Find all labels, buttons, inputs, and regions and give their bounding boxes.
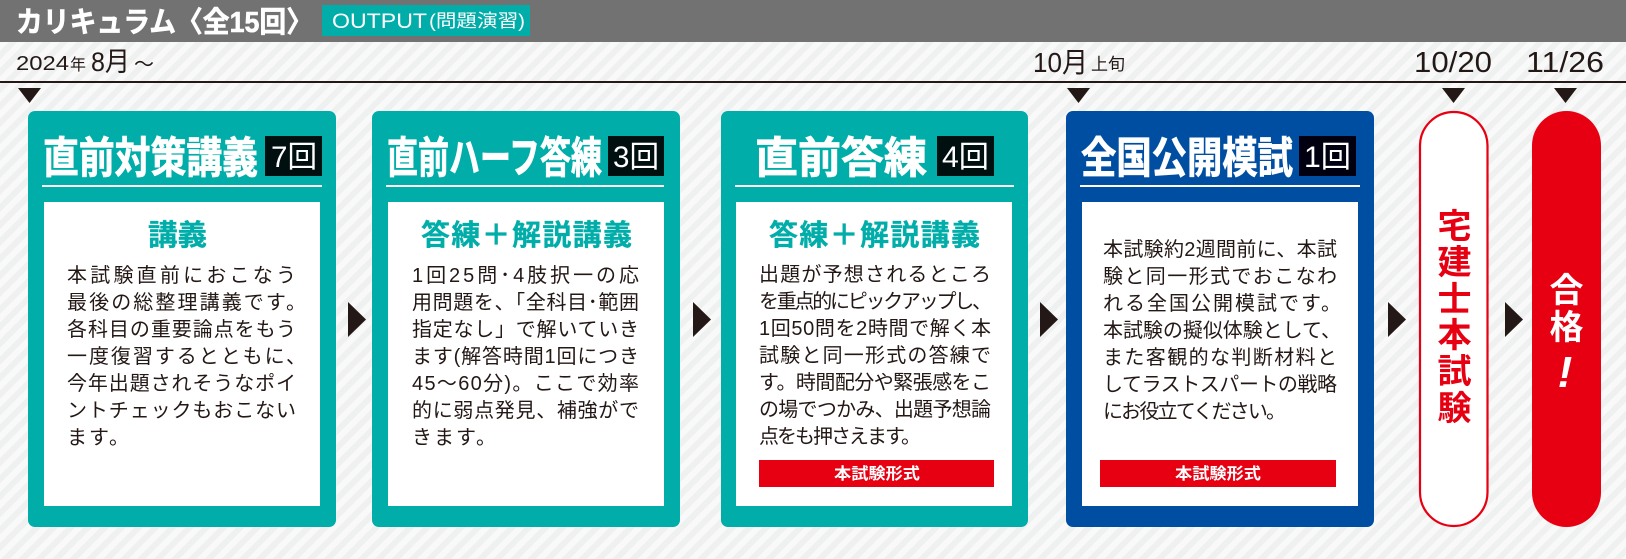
panel: 直前ハーフ答練 <box>372 111 680 527</box>
timeline dates: 2024 <box>16 53 69 75</box>
output tag <box>322 5 530 36</box>
text block: 答練＋解説講義 <box>769 219 980 252</box>
count badge: 3回 <box>613 141 659 174</box>
text block: 1回25問･4肢択一の応 <box>412 264 639 287</box>
text block: 的に弱点発見、補強がで <box>412 399 639 422</box>
text block: 用問題を、「全科目･範囲 <box>412 291 639 314</box>
text block: す。時間配分や緊張感をこ <box>759 371 991 394</box>
text block: 一度復習するとともに、 <box>67 345 306 368</box>
pill: 宅建士本試験 <box>1420 112 1488 526</box>
count badge: 4回 <box>942 141 989 174</box>
pill: 合格! <box>1532 111 1601 527</box>
text block: きます。 <box>412 427 496 449</box>
text block: また客観的な判断材料と <box>1103 346 1337 369</box>
heading: 直前答練 <box>755 135 927 183</box>
count badge <box>1299 136 1356 176</box>
text block: 本試験直前におこなう <box>67 264 296 287</box>
output tag: (問題演習) <box>429 11 525 31</box>
timeline dates: 8月 <box>91 47 130 77</box>
text block: 1回50問を2時間で解く本 <box>759 317 991 340</box>
count badge <box>937 136 994 176</box>
text block: 験と同一形式でおこなわ <box>1103 265 1337 288</box>
text block: してラストスパートの戦略 <box>1103 373 1337 396</box>
text block: ます(解答時間1回につき <box>412 345 639 368</box>
text block: 45〜60分)。ここで効率 <box>412 372 639 395</box>
arrow <box>1388 302 1406 337</box>
pill: 合格!: ! <box>1558 348 1572 397</box>
arrow <box>348 302 366 337</box>
timeline dates: 10月 <box>1033 47 1088 78</box>
text block: 本試験約2週間前に、本試 <box>1103 238 1337 261</box>
timeline dates: 上旬 <box>1091 55 1125 74</box>
pill: 合格!: 合 <box>1550 272 1584 310</box>
text block: 講義 <box>148 219 207 252</box>
header bar <box>0 0 1626 42</box>
text block: 本試験の擬似体験として、 <box>1103 319 1341 342</box>
panel: 全国公開模試 <box>1066 111 1374 527</box>
count badge: 7回 <box>271 141 317 174</box>
text block: 点をも押さえます。 <box>759 425 921 448</box>
arrow <box>693 302 711 337</box>
timeline dates: 11/26 <box>1526 47 1604 79</box>
arrow <box>1040 302 1058 337</box>
count badge: 1回 <box>1304 141 1351 174</box>
format label <box>759 460 994 487</box>
text block: れる全国公開模試です。 <box>1103 292 1341 315</box>
pill: 宅建士本試験: 宅 <box>1438 208 1472 246</box>
text block: 今年出題されそうなポイ <box>67 372 296 395</box>
text block: 最後の総整理講義です。 <box>67 291 306 314</box>
text block <box>736 202 1012 506</box>
timeline markers <box>18 88 1577 103</box>
timeline dates <box>16 47 1604 79</box>
text block: 指定なし」で解いていき <box>412 318 639 341</box>
text block: ます。 <box>67 427 129 449</box>
timeline dates: 10/20 <box>1414 47 1492 79</box>
pill: 宅建士本試験: 士 <box>1438 281 1472 319</box>
text block <box>1082 202 1358 506</box>
text block: 出題が予想されるところ <box>759 263 991 286</box>
pill: 宅建士本試験: 建 <box>1438 244 1472 282</box>
format label: 本試験形式 <box>1175 465 1261 483</box>
text block: にお役立てください。 <box>1103 400 1286 423</box>
text block <box>388 202 664 506</box>
pill: 宅建士本試験: 本 <box>1438 317 1472 355</box>
text block: 答練＋解説講義 <box>421 219 632 252</box>
panel: 直前答練 <box>721 111 1028 527</box>
text block <box>44 202 320 506</box>
heading: 全国公開模試 <box>1081 135 1293 183</box>
format label: 本試験形式 <box>834 465 920 483</box>
count badge <box>265 136 322 176</box>
title: カリキュラム〈全15回〉 <box>16 6 313 39</box>
panel: 直前対策講義 <box>28 111 336 527</box>
text block: 各科目の重要論点をもう <box>67 318 296 341</box>
pill: 宅建士本試験: 試 <box>1438 353 1472 391</box>
heading: 直前ハーフ答練 <box>387 135 602 183</box>
heading: 直前対策講義 <box>43 135 258 183</box>
text block: の場でつかみ、出題予想論 <box>759 398 991 421</box>
arrow <box>1505 302 1523 337</box>
text block: 試験と同一形式の答練で <box>759 344 991 367</box>
pill: 宅建士本試験: 験 <box>1438 390 1472 428</box>
timeline dates: 年 <box>70 56 86 74</box>
timeline dates: 〜 <box>134 54 154 76</box>
pill: 合格!: 格 <box>1550 309 1584 347</box>
text block: ントチェックもおこない <box>67 399 296 422</box>
output tag: OUTPUT <box>332 10 427 33</box>
count badge <box>608 136 664 176</box>
text block: を重点的にピックアップし、 <box>759 290 992 313</box>
format label <box>1100 460 1336 487</box>
